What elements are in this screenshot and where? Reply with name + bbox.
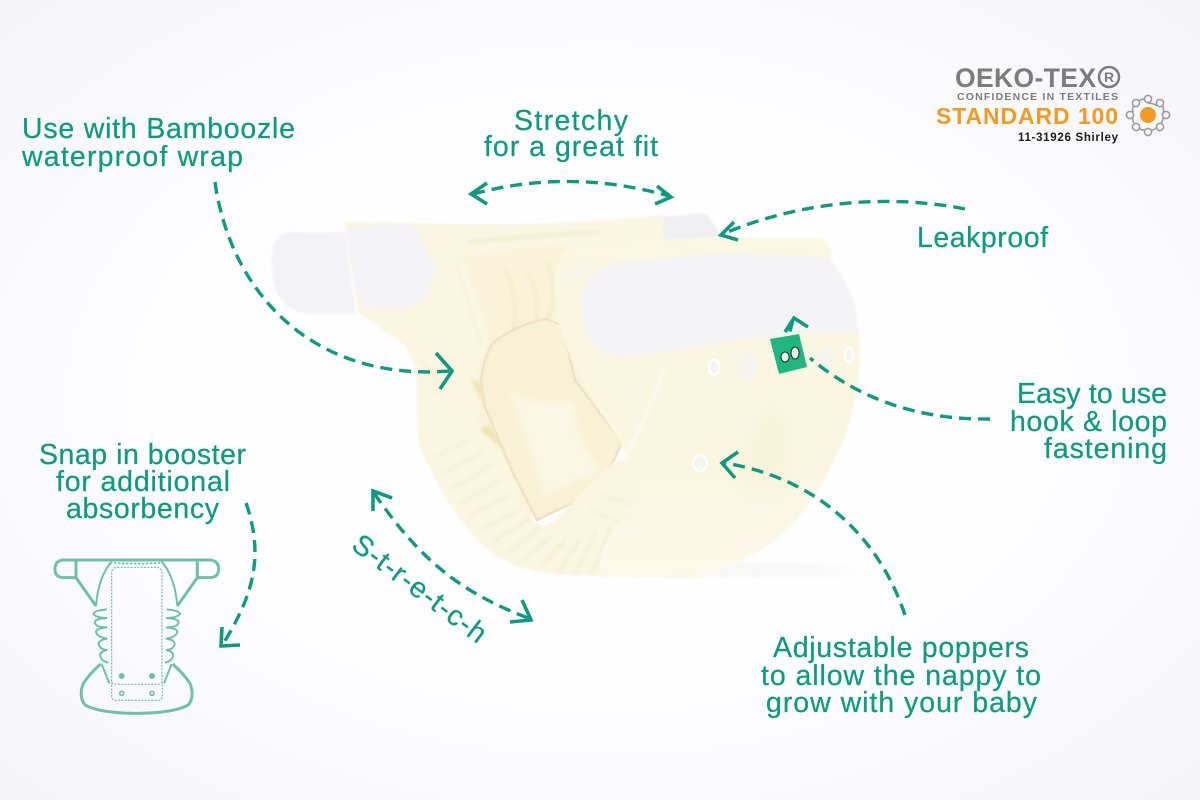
text: stretchy: for a great fit: [484, 131, 658, 163]
logo standard: STANDARD 100: [936, 103, 1118, 129]
arrow: stretchy waist: [471, 181, 671, 204]
diagram snaps open: [120, 691, 154, 695]
diagram snaps filled: [119, 673, 155, 679]
hook and loop strip: [580, 253, 858, 358]
pleat shadows: [470, 232, 600, 335]
arrow: stretch leg: [373, 491, 531, 622]
text: adjustable poppers: Adjustable poppers: [773, 632, 1029, 664]
front fold: [622, 370, 665, 462]
text: stretchy: [484, 105, 658, 163]
arrow: hook and loop: [785, 318, 990, 419]
left hook tab: [272, 232, 356, 314]
text: stretchy: Stretchy: [514, 105, 629, 137]
logo wordmark: OEKO-TEX: [955, 63, 1096, 93]
text: stretch: S-t-r-e-t-c-h: [346, 528, 493, 650]
popper left ring: [709, 360, 719, 374]
side panel fold: [418, 262, 482, 395]
booster fold shading: [510, 390, 600, 495]
photo: cloth nappy: [272, 213, 859, 578]
diagram right elastic: [165, 609, 180, 663]
logo flower: [1126, 95, 1170, 136]
green tag: [770, 334, 807, 374]
text: adjustable poppers: to allow the nappy to: [761, 660, 1041, 692]
logo certificate number: 11-31926 Shirley: [1018, 132, 1119, 144]
text: hook and loop: fastening: [1044, 433, 1167, 465]
tag logo eyes: [781, 347, 799, 362]
registered mark: R: [1104, 69, 1114, 85]
front panel: [554, 238, 859, 577]
diagram outline: [55, 560, 219, 713]
arrow: adjustable poppers: [722, 452, 905, 615]
front panel shading: [740, 400, 793, 495]
logo: oeko-tex: [936, 63, 1170, 144]
logo tagline: CONFIDENCE IN TEXTILES: [957, 91, 1118, 103]
elastic creases: [432, 440, 635, 574]
nappy shadow: [630, 564, 850, 576]
popper far right: [845, 348, 853, 362]
text: snap in booster: absorbency: [66, 493, 220, 525]
left leg side panel: [358, 255, 520, 500]
arrow: snap in booster: [221, 503, 255, 646]
text: bamboozle wrap: Use with Bamboozle: [22, 113, 295, 145]
diagram: nappy with booster: [55, 560, 219, 713]
booster insert: [481, 319, 622, 520]
text: snap in booster: [39, 439, 246, 525]
text: adjustable poppers: grow with your baby: [766, 687, 1038, 719]
diagram booster dashed: [112, 567, 162, 700]
arrow: bamboozle wrap: [215, 182, 452, 389]
text: adjustable poppers: [761, 632, 1041, 719]
gap shadow: [470, 378, 505, 450]
popper middle disc: [735, 352, 757, 380]
back right hook strip: [663, 213, 720, 244]
text: hook and loop: [1010, 378, 1167, 465]
leg elastic: [418, 425, 700, 578]
arrow: leakproof: [721, 201, 965, 240]
diagram waist curves: [96, 562, 177, 683]
back waistband: [345, 215, 668, 340]
text: snap in booster: Snap in booster: [39, 439, 246, 471]
text: hook and loop: hook & loop: [1010, 406, 1167, 438]
lower popper: [693, 455, 707, 471]
text: leakproof: Leakproof: [917, 222, 1048, 254]
text: snap in booster: for additional: [56, 466, 230, 498]
text: bamboozle wrap: waterproof wrap: [21, 141, 243, 173]
registered mark: [1099, 67, 1119, 87]
inner pleats: [445, 245, 600, 520]
left inner hook patch: [345, 223, 437, 309]
text: bamboozle wrap: [21, 113, 295, 173]
diagram left elastic: [93, 609, 108, 663]
text: hook and loop: Easy to use: [1017, 378, 1167, 410]
diagram waist ruffle: [110, 560, 163, 566]
popper right disc: [817, 346, 835, 372]
